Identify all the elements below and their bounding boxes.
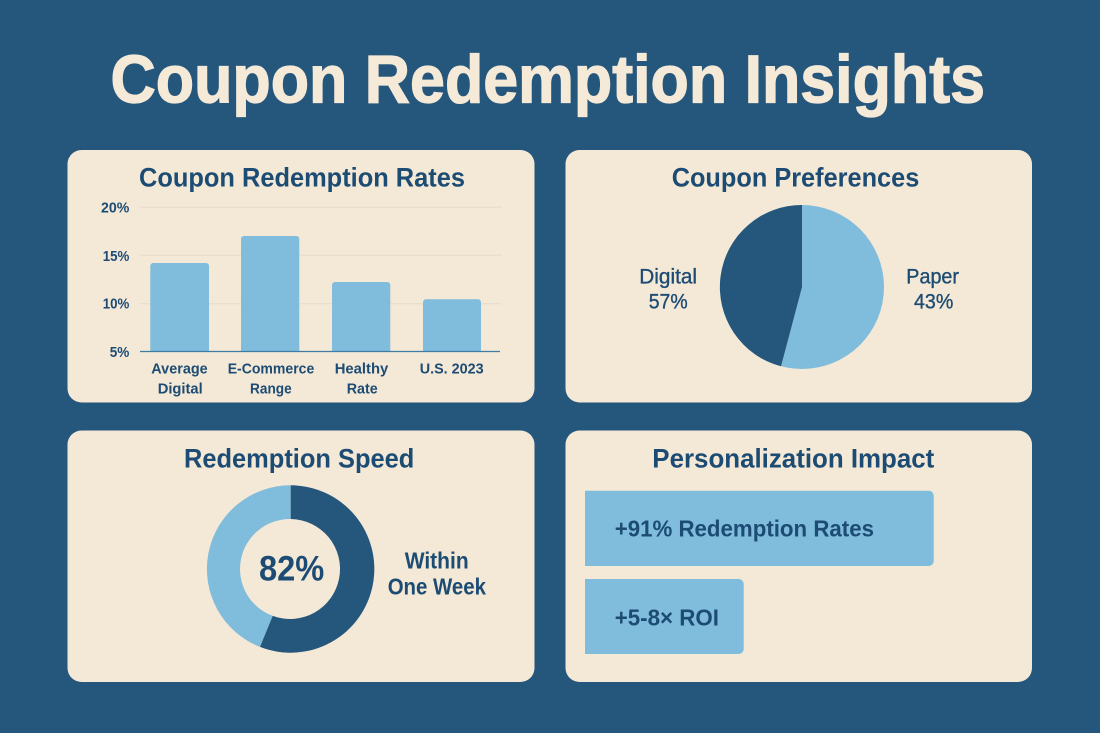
panel: personalization impact bbox=[566, 430, 1032, 682]
y axis labels: 15% bbox=[103, 248, 129, 265]
label: within one week bbox=[388, 548, 486, 599]
x axis labels: Range bbox=[250, 380, 292, 397]
bar chart: redemption rates bbox=[101, 200, 502, 397]
label: paper 43%: 43% bbox=[914, 291, 953, 314]
x axis labels: Average bbox=[151, 360, 208, 377]
x axis labels: Healthy bbox=[335, 360, 389, 377]
bar: e-commerce range bbox=[241, 236, 299, 352]
label: within one week: Within bbox=[405, 548, 469, 574]
panel: redemption speed bbox=[68, 430, 534, 682]
label: within one week: One Week bbox=[388, 573, 486, 599]
y axis labels: 20% bbox=[101, 200, 129, 217]
heading: coupon redemption rates: Coupon Redemption Rates bbox=[139, 163, 465, 193]
label: paper 43% bbox=[906, 266, 959, 314]
heading: coupon preferences: Coupon Preferences bbox=[672, 163, 919, 193]
panel: coupon redemption rates bbox=[68, 150, 534, 402]
bar: u.s. 2023 bbox=[423, 299, 481, 352]
bar: +5-8x roi: +5-8× ROI bbox=[615, 604, 719, 630]
x axis labels: U.S. 2023 bbox=[420, 360, 484, 377]
pie chart: digital vs paper bbox=[720, 205, 884, 369]
donut centre value: 82% bbox=[259, 549, 324, 588]
label: digital 57%: 57% bbox=[649, 291, 688, 314]
y axis labels bbox=[101, 200, 129, 361]
label: digital 57% bbox=[639, 266, 697, 314]
heading: personalization impact: Personalization Impact bbox=[652, 443, 934, 473]
bar: +91% redemption rates: +91% Redemption Rates bbox=[615, 516, 874, 542]
y axis labels: 5% bbox=[110, 344, 129, 361]
bar: average digital bbox=[150, 263, 209, 352]
donut chart: 82% within one week bbox=[207, 485, 374, 653]
bar: +5-8x roi bbox=[585, 579, 744, 654]
x axis labels: Digital bbox=[158, 380, 203, 397]
y axis labels: 10% bbox=[103, 296, 129, 313]
title: Coupon Redemption Insights bbox=[110, 42, 985, 118]
bar: healthy rate bbox=[332, 282, 390, 352]
heading: redemption speed: Redemption Speed bbox=[184, 443, 414, 473]
x axis labels bbox=[151, 360, 484, 397]
label: digital 57%: Digital bbox=[639, 266, 697, 289]
label: paper 43%: Paper bbox=[906, 266, 959, 289]
x axis labels: E-Commerce bbox=[228, 360, 314, 377]
panel: coupon preferences bbox=[566, 150, 1032, 402]
x axis labels: Rate bbox=[347, 380, 378, 397]
bar: +91% redemption rates bbox=[585, 491, 934, 566]
